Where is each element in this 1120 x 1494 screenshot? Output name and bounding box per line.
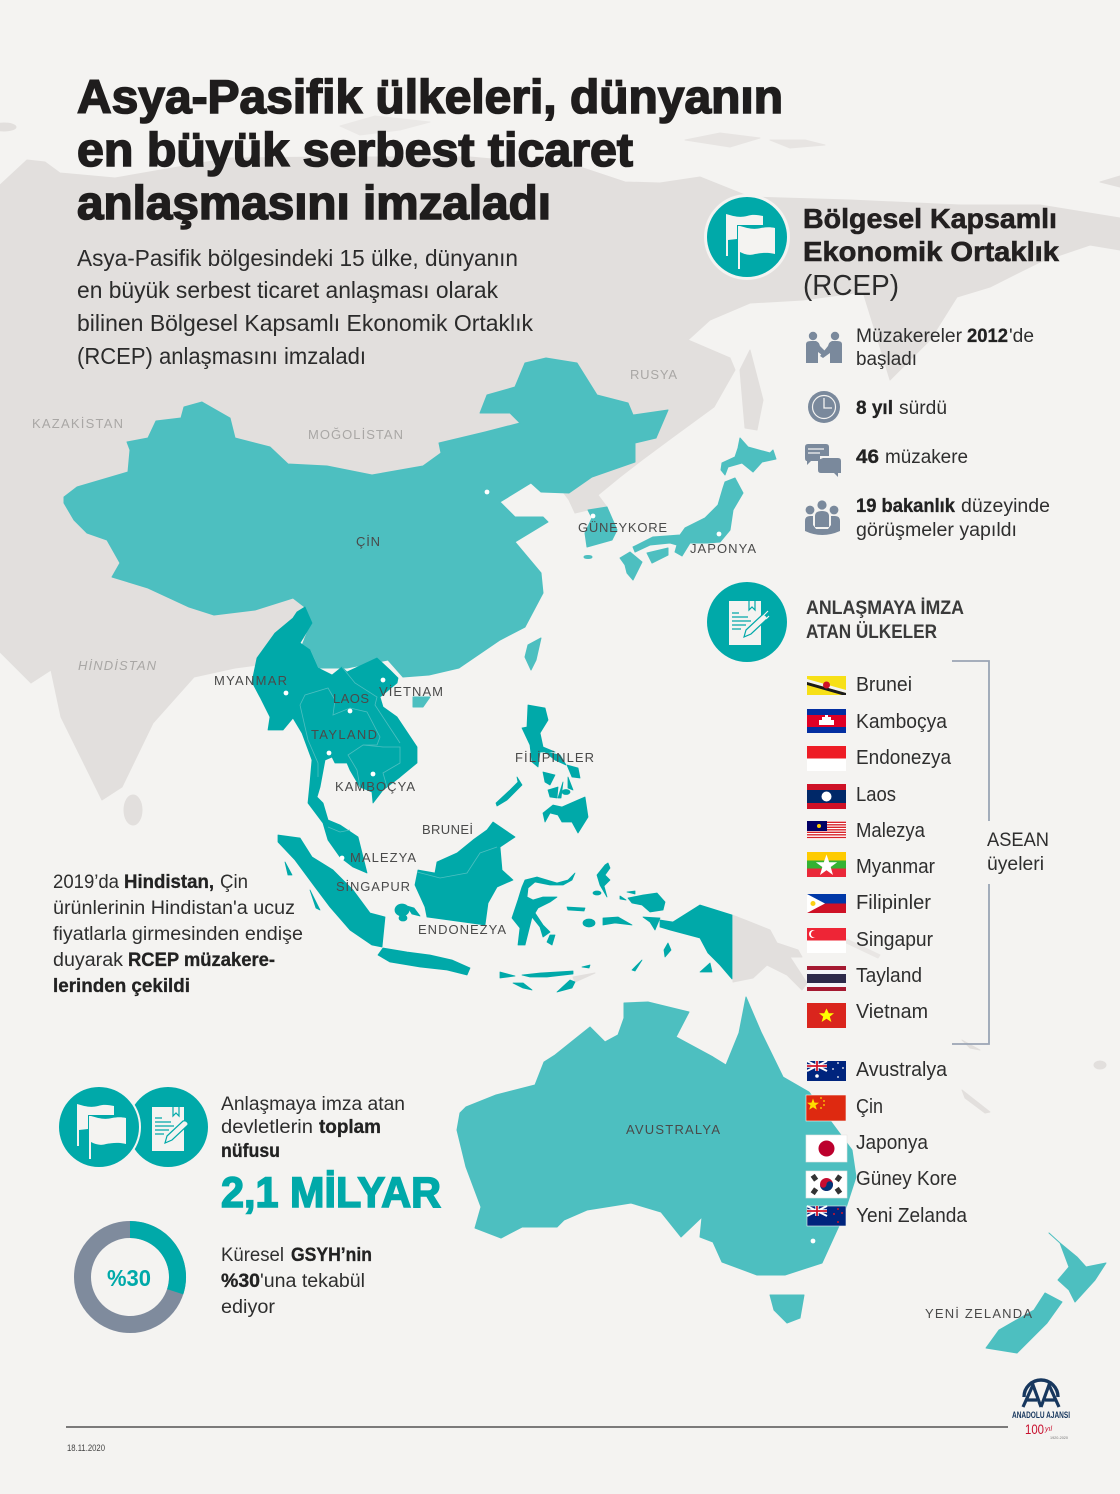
text block: India withdrawal: RCEP müzakere-	[128, 950, 275, 971]
flag: China	[806, 1095, 846, 1121]
icon: flags badge small	[57, 1085, 141, 1169]
map: country labels: VİETNAM	[379, 684, 443, 699]
map: country labels: ÇİN	[356, 534, 380, 549]
text block: India withdrawal: ürünlerinin Hindistan'a ucuz	[53, 898, 295, 919]
text block: India withdrawal: lerinden çekildi	[53, 976, 190, 997]
fact: negotiations started 2012: 2012	[967, 326, 1008, 347]
flag: Singapore	[807, 928, 846, 953]
label: ASEAN	[987, 830, 1049, 875]
title: anlaşmasını imzaladı	[77, 176, 551, 229]
donut chart: 30%	[82, 1230, 178, 1324]
flag list: other signatories: Güney Kore	[856, 1168, 957, 1190]
logo: Anadolu Ajansı: yıl	[1044, 1426, 1052, 1433]
text block: global GDP: GSYH’nin	[291, 1245, 372, 1266]
flag list: ASEAN members: Malezya	[856, 820, 926, 842]
fact: negotiations started 2012	[806, 326, 1034, 370]
fact: negotiations started 2012: başladı	[856, 349, 917, 370]
map: country labels: JAPONYA	[690, 541, 756, 556]
map: China	[64, 358, 668, 677]
big number: 2,1 milyar: 2,1 MİLYAR	[221, 1169, 441, 1217]
map: grey neighbouring land	[0, 116, 1120, 1113]
flag list: other signatories	[806, 1059, 968, 1227]
map: country labels: TAYLAND	[311, 727, 377, 742]
logo: Anadolu Ajansı: 1920-2020	[1050, 1435, 1069, 1440]
flag list: other signatories: Japonya	[856, 1132, 929, 1154]
title: Asya-Pasifik ülkeleri, dünyanın	[77, 70, 783, 123]
map: internal borders	[300, 667, 497, 878]
title: en büyük serbest ticaret	[77, 123, 633, 176]
map: Australia, Tasmania and New Zealand	[457, 997, 1106, 1353]
map: country labels: KAZAKİSTAN	[32, 416, 123, 431]
map: light teal islands of China, Korea and Japan	[413, 438, 776, 707]
text block: total population: devletlerin	[221, 1117, 313, 1138]
fact: 19 ministerial meetings	[805, 496, 1050, 541]
flag: Malaysia	[807, 821, 846, 839]
map: country labels: MALEZYA	[350, 850, 416, 865]
text block: India withdrawal: Hindistan,	[124, 872, 214, 893]
flag list: ASEAN members	[807, 674, 952, 1028]
flag list: ASEAN members: Endonezya	[856, 747, 952, 769]
heading: RCEP: Bölgesel Kapsamlı	[803, 203, 1057, 234]
flag: Myanmar	[807, 852, 846, 877]
flag list: ASEAN members: Brunei	[856, 674, 912, 696]
map: capital dots	[284, 490, 815, 1243]
text block: global GDP: %30	[221, 1271, 260, 1292]
label: ASEAN: ASEAN	[987, 830, 1049, 851]
map: country labels: MYANMAR	[214, 673, 287, 688]
map: country labels: RUSYA	[630, 367, 677, 382]
map: country labels: MOĞOLİSTAN	[308, 427, 403, 442]
flag list: ASEAN members: Myanmar	[856, 856, 935, 878]
text block: global GDP: ediyor	[221, 1297, 276, 1318]
flag: Brunei	[807, 676, 846, 695]
text block: India withdrawal	[53, 872, 303, 997]
map: country labels: HİNDİSTAN	[78, 658, 157, 673]
flag list: ASEAN members: Singapur	[856, 929, 933, 951]
flag: Cambodia	[807, 709, 846, 733]
logo: Anadolu Ajansı: ANADOLU AJANSI	[1012, 1410, 1070, 1421]
icon: document badge small	[128, 1087, 208, 1167]
flag list: other signatories: Çin	[856, 1096, 883, 1118]
fact: negotiations started 2012: Müzakereler	[856, 326, 963, 347]
logo: Anadolu Ajansı	[1012, 1380, 1070, 1440]
flag: Australia	[807, 1061, 846, 1081]
map: ASEAN members in dark teal	[252, 607, 732, 992]
heading: signatory countries: ATAN ÜLKELER	[806, 622, 937, 643]
bracket: ASEAN members	[952, 661, 989, 1044]
fact: 19 ministerial meetings: 19 bakanlık	[856, 496, 955, 517]
map: country labels: LAOS	[333, 691, 369, 706]
heading: RCEP: (RCEP)	[803, 270, 899, 302]
title	[77, 70, 783, 229]
text block: global GDP	[221, 1245, 372, 1318]
text block: India withdrawal: 2019’da	[53, 872, 119, 893]
text block: India withdrawal: duyarak	[53, 950, 124, 971]
footer rule	[66, 1426, 1008, 1428]
flag: Laos	[807, 784, 846, 809]
text block: total population	[221, 1094, 405, 1162]
flag: Indonesia	[807, 746, 846, 771]
flag: New Zealand	[807, 1206, 846, 1226]
flag: South Korea	[806, 1171, 847, 1198]
intro paragraph: (RCEP) anlaşmasını imzaladı	[77, 343, 366, 369]
heading: RCEP: Ekonomik Ortaklık	[803, 236, 1059, 267]
flag list: ASEAN members: Laos	[856, 784, 896, 806]
logo: Anadolu Ajansı: 100	[1025, 1421, 1044, 1437]
date: 18.11.2020	[67, 1443, 105, 1454]
map: country labels: BRUNEİ	[422, 822, 473, 837]
text block: total population: toplam	[319, 1117, 381, 1138]
intro paragraph: bilinen Bölgesel Kapsamlı Ekonomik Ortaklık	[77, 310, 533, 336]
flag: Vietnam	[807, 1003, 846, 1028]
flag list: ASEAN members: Vietnam	[856, 1001, 928, 1023]
map: country labels: SİNGAPUR	[336, 879, 410, 894]
donut chart: 30%: %30	[107, 1265, 151, 1291]
fact: 46 negotiations	[805, 444, 968, 477]
heading: RCEP	[803, 203, 1059, 302]
heading: signatory countries: ANLAŞMAYA İMZA	[806, 598, 964, 619]
flag list: other signatories: Yeni Zelanda	[856, 1205, 968, 1227]
fact: 8 years: 8 yıl	[856, 398, 893, 419]
flag: Thailand	[807, 966, 846, 991]
flag list: ASEAN members: Kamboçya	[856, 711, 948, 733]
flag: Japan	[806, 1135, 847, 1162]
fact: 8 years: sürdü	[899, 398, 947, 419]
text block: global GDP: Küresel	[221, 1245, 284, 1266]
text block: total population: nüfusu	[221, 1141, 280, 1162]
icon: signing document badge	[707, 582, 787, 662]
map: country labels: GÜNEYKORE	[578, 520, 667, 535]
map: country labels: YENİ ZELANDA	[925, 1306, 1032, 1321]
fact: 46 negotiations: müzakere	[885, 447, 968, 468]
map: country labels	[32, 367, 1032, 1321]
label: ASEAN: üyeleri	[987, 854, 1044, 875]
flag list: ASEAN members: Tayland	[856, 965, 922, 987]
text block: total population: Anlaşmaya imza atan	[221, 1094, 405, 1115]
intro paragraph: en büyük serbest ticaret anlaşması olarak	[77, 277, 498, 303]
intro paragraph	[77, 245, 533, 369]
fact: 8 years	[808, 391, 947, 423]
flag: Philippines	[807, 894, 846, 913]
text block: India withdrawal: Çin	[220, 872, 248, 893]
fact: 19 ministerial meetings: görüşmeler yapıldı	[856, 520, 1017, 541]
map: country labels: KAMBOÇYA	[335, 779, 415, 794]
text block: India withdrawal: fiyatlarla girmesinden endişe	[53, 924, 303, 945]
flag list: other signatories: Avustralya	[856, 1059, 948, 1081]
icon: RCEP flags badge	[704, 194, 790, 280]
flag list: ASEAN members: Filipinler	[856, 892, 931, 914]
heading: signatory countries	[806, 598, 964, 643]
fact: negotiations started 2012: 'de	[1009, 326, 1034, 347]
fact: 46 negotiations: 46	[856, 447, 879, 468]
text block: global GDP: 'una tekabül	[260, 1271, 365, 1292]
fact: 19 ministerial meetings: düzeyinde	[961, 496, 1050, 517]
map: country labels: FİLİPİNLER	[515, 750, 594, 765]
intro paragraph: Asya-Pasifik bölgesindeki 15 ülke, dünyanın	[77, 245, 518, 271]
map: country labels: ENDONEZYA	[418, 922, 506, 937]
map: country labels: AVUSTRALYA	[626, 1122, 720, 1137]
